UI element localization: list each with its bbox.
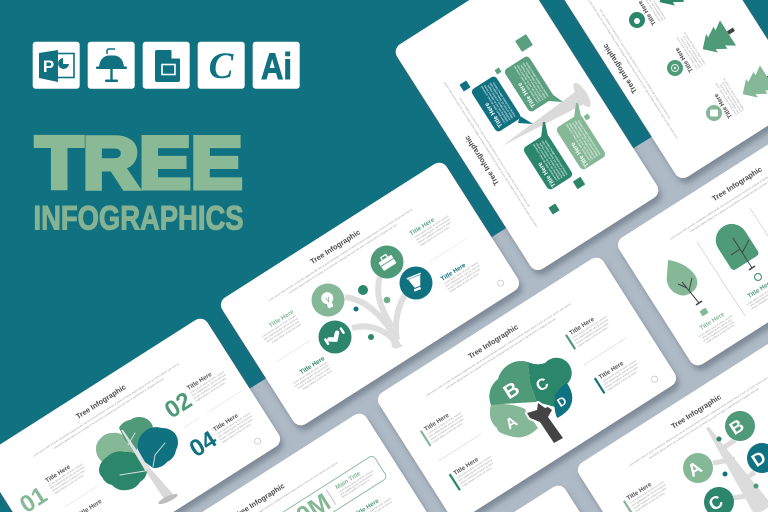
callout: dark green: adipiscing elit, sed do eiusmod tempo — [534, 142, 561, 181]
panel: top callout slide — [392, 0, 662, 273]
callout: dark green: Title Here — [536, 160, 558, 188]
tree trunk — [502, 81, 594, 146]
slide texts: tetur adipiscing elit, sed do eiusmod — [191, 373, 227, 397]
slide texts: tetur adipiscing elit, sed do eiusmod — [263, 317, 299, 341]
callout: teal: adipiscing elit, sed do eiusmod tempo — [482, 84, 509, 123]
slide texts: 02 — [160, 387, 197, 424]
item: left column: magna aliqua ut enim ad mini — [706, 324, 735, 344]
slide texts: Title Here — [440, 261, 468, 283]
slide texts: tempor incididunt ut labore et dolor — [460, 462, 494, 485]
slide texts: tempor incididunt ut labore et dolor — [193, 377, 227, 400]
slide texts: Title Here — [186, 371, 214, 392]
slide texts: magna aliqua ut enim ad minim — [271, 323, 302, 344]
callout: teal: Lorem ipsum dolor sit amet, consectet — [479, 85, 506, 124]
slide texts: tetur adipiscing elit, sed do eiusmo — [340, 473, 374, 496]
icon: top pine tree — [652, 0, 693, 15]
callout: dark green: Lorem ipsum dolor sit amet, consectet — [531, 143, 558, 182]
slide card — [615, 99, 768, 369]
panel: bottom right circle tree slide — [575, 324, 768, 512]
slide texts: Lorem ipsum dolor sit amet, consectetur adipiscing elit, sed do eiusmod tempor incididunt ut labore et dolore magna aliqua ut enim ad minim veniam quis nostrud — [425, 302, 572, 397]
slide texts: magna aliqua ut enim ad minim — [461, 467, 492, 488]
slide texts: Lorem ipsum dolor sit amet, consect — [48, 463, 84, 487]
icon: Illustrator — [253, 42, 300, 89]
slide texts: Title Here — [452, 456, 480, 477]
icon: PowerPoint: P — [43, 57, 54, 76]
slide texts: Title Here — [212, 412, 240, 433]
panel: bottom left numbered slide — [0, 315, 283, 512]
item: second: tetur adipiscing elit, sed do eius — [680, 37, 701, 68]
slide texts — [0, 331, 271, 512]
callout: teal: incididunt ut labore et dolore magna — [486, 84, 512, 121]
dividers — [697, 208, 768, 316]
slide texts: tetur adipiscing elit, sed do eiusmod — [416, 217, 451, 242]
slide texts: Lorem ipsum dolor sit amet, consect — [601, 359, 637, 384]
slide texts: tetur adipiscing elit, sed do eiusmod — [445, 264, 481, 288]
item: third: tempor incididunt ut labore et do — [721, 80, 743, 113]
slide texts: tempor incididunt ut labore et dolor — [266, 320, 301, 343]
canopy: segment B — [489, 361, 537, 405]
slide card — [392, 0, 662, 273]
callout: teal: nostrud exercitation ullamco laboris — [491, 81, 517, 118]
callout: light green: Title Here — [569, 140, 591, 168]
slide texts: tempor incididunt ut labore et — [341, 479, 370, 499]
callout: light green — [555, 103, 607, 171]
slide texts: exercitation ullamco laboris nisi ut aliquip ex ea commodo consequat duis aute irure dolor in reprehenderit in voluptate velit esse — [53, 377, 165, 450]
canopy: teal leaf — [138, 427, 178, 468]
slide texts: tempor incididunt ut labore et dolor — [447, 268, 481, 291]
slide texts — [398, 274, 659, 503]
slide texts: Lorem ipsum dolor sit amet, consect — [190, 370, 225, 395]
item: right column — [741, 274, 768, 312]
callout: teal — [470, 75, 533, 133]
slide texts: Lorem ipsum dolor sit amet, consect — [338, 470, 374, 494]
slide texts: magna aliqua ut enim ad minim — [449, 272, 480, 294]
panel: software icons — [33, 42, 300, 89]
slide texts: tetur adipiscing elit, sed do eiusmod — [458, 458, 494, 482]
slide card — [0, 315, 283, 512]
item: second: magna aliqua ut enim ad minim ve — [683, 31, 706, 65]
icon: handshake circle — [318, 320, 352, 354]
slide card — [375, 254, 679, 512]
icon: light bulb circle — [312, 284, 344, 316]
slide texts: Main Title — [334, 470, 363, 491]
slide texts: Title Here — [299, 355, 327, 376]
icon: leaf tree — [667, 260, 702, 305]
icon: round badges — [629, 12, 722, 121]
slide texts: Lorem ipsum dolor sit amet, consectetur adipiscing elit, sed do eiusmod tempor incididunt ut labore et dolore magna aliqua ut enim ad minim veniam quis nostrud — [33, 362, 180, 458]
item: left column: tempor incididunt ut labore et do — [703, 320, 735, 342]
item: second: tempor incididunt ut labore et do — [682, 34, 704, 67]
circle B: B — [726, 415, 748, 439]
canopy: dark leaf — [99, 451, 147, 490]
tree trunk — [121, 430, 179, 506]
canopy: segment D — [554, 383, 572, 418]
icon: Google Slides — [143, 42, 190, 89]
icon: round tree — [710, 218, 760, 271]
callout: dark green: aliqua ut enim ad minim veniam quis — [540, 139, 566, 178]
slide texts: Tree Infographic — [466, 322, 520, 361]
slide texts: tetur adipiscing elit, sed do eiusmod — [50, 466, 86, 490]
slide heading and intro: exercitation ullamco laboris nisi ut aliquip ex ea commodo consequat duis aute irure dolor in reprehenderit in voluptate velit esse — [599, 8, 671, 119]
item: third — [708, 77, 745, 120]
icon: briefcase circle — [370, 246, 404, 278]
slide texts: Lorem ipsum dolor sit amet, consect — [427, 411, 463, 435]
slide card — [537, 0, 768, 181]
slide texts — [185, 432, 401, 512]
slide texts: exercitation ullamco laboris nisi ut aliquip ex ea commodo consequat duis aute irure dolor in reprehenderit in voluptate velit esse — [288, 223, 398, 295]
slide texts: Lorem ipsum dolor sit amet, consect — [629, 480, 665, 505]
tree trunk and branches — [706, 427, 768, 512]
slide texts: Tree Infographic — [74, 382, 128, 421]
slide texts: Title Here — [268, 308, 296, 329]
letters: A — [502, 413, 521, 433]
callout: light green: aliqua ut enim ad minim veniam quis — [573, 119, 599, 158]
slide texts: magna aliqua ut enim ad minim — [577, 327, 608, 348]
callout: light green: incididunt ut labore et dolore magna — [571, 122, 597, 159]
trunk over canopy — [120, 430, 165, 475]
slide texts: tempor incididunt ut labore et dolor — [605, 366, 639, 389]
slide texts: magna aliqua ut enim ad minim — [221, 423, 252, 444]
decorative squares — [459, 34, 590, 215]
slide texts: exercitation ullamco laboris nisi ut aliquip ex ea commodo consequat duis aute irure dolor in reprehenderit in voluptate velit esse — [648, 387, 760, 460]
slide texts: Title Here — [626, 481, 653, 502]
slide texts: magna aliqua ut enim ad minim — [195, 382, 226, 403]
slide texts: magna aliqua ut enim ad minim — [419, 226, 450, 247]
icon: middle pine tree — [695, 17, 742, 62]
item: second: Title Here — [674, 46, 695, 73]
slide texts: magna aliqua ut enim ad minim — [432, 423, 463, 444]
slide texts: Lorem ipsum dolor sit amet, consect — [572, 315, 608, 339]
callout: medium green: aliqua ut enim ad minim veniam quis — [521, 61, 547, 100]
callout: medium green: adipiscing elit, sed do eiusmod tempo — [515, 64, 542, 103]
slide texts: Lorem ipsum dolor sit amet, consect — [261, 314, 297, 338]
item: left column: tetur adipiscing elit, sed do eius — [702, 318, 733, 340]
item: third: Title Here — [713, 92, 734, 119]
slide texts: tetur adipiscing elit, sed do eiusmod — [294, 364, 330, 388]
decorative dots — [354, 285, 390, 340]
callout: medium green: Title Here — [516, 81, 537, 109]
heading: INFOGRAPHICS: INFOGRAPHICS — [34, 200, 244, 238]
tree trunk — [527, 403, 563, 443]
slide texts: tempor incididunt ut labore et dolor — [430, 418, 465, 441]
letters: B — [500, 378, 524, 404]
slide texts: tempor incididunt ut labore et dolor — [297, 367, 331, 390]
slide texts: exercitation ullamco laboris nisi ut aliquip ex ea commodo consequat duis aute irure dolor in reprehenderit in voluptate velit esse — [445, 317, 557, 390]
slide texts: tempor incididunt ut labore et dolor — [633, 487, 667, 510]
icon: Illustrator: Ai — [261, 46, 292, 87]
item: third: Lorem ipsum dolor sit amet, conse — [714, 82, 738, 116]
callout: teal: Title Here — [483, 101, 504, 129]
canopy: segment C — [528, 358, 572, 407]
decorative dots — [716, 436, 758, 488]
canopy: medium leaf — [119, 417, 153, 450]
slide texts: Lorem ipsum dolor sit amet, consect — [216, 412, 252, 436]
callout: light green: Lorem ipsum dolor sit amet, consectet — [564, 123, 591, 162]
slide heading and intro: Tree Infographic — [601, 42, 639, 95]
slide texts — [238, 177, 505, 410]
icon: Canva: C — [209, 46, 235, 87]
letters — [500, 375, 570, 433]
panel: centre lettered tree slide — [375, 254, 679, 512]
letters: D — [554, 393, 570, 410]
canopy: segment A — [490, 404, 538, 437]
slide texts: Title Here — [408, 216, 436, 237]
slide texts: Tree Infographic — [309, 228, 362, 266]
callout: medium green: Lorem ipsum dolor sit amet, consectet — [512, 65, 539, 104]
icon: megaphone circle — [400, 266, 432, 300]
slide heading and intro: Lorem ipsum dolor sit amet, consectetur adipiscing elit, sed do eiusmod tempor incididunt ut labore et dolore magna aliqua ut enim ad minim veniam quis nostrud — [443, 81, 538, 228]
callout: light green: adipiscing elit, sed do eiusmod tempo — [567, 122, 594, 161]
slide card — [218, 159, 522, 429]
icon: lower pine tree — [735, 62, 768, 107]
slide texts: Title Here — [44, 463, 72, 484]
slide texts: tetur adipiscing elit, sed do eiusmod — [574, 318, 609, 342]
slide texts: Title Here — [423, 412, 451, 433]
circle C — [704, 487, 734, 512]
callout: dark green: nostrud exercitation ullamco laboris — [543, 139, 569, 176]
slide texts: Lorem ipsum dolor sit amet, consect — [443, 261, 479, 285]
slide texts: magna aliqua ut enim ad minim — [53, 474, 84, 495]
panel: bottom centre metric slide — [138, 410, 442, 512]
slide texts — [601, 361, 768, 512]
slide texts: magna aliqua ut enim ad minim — [302, 369, 333, 391]
slide heading and intro: Tree Infographic — [462, 134, 501, 187]
slide texts: tempor incididunt ut labore et dolor — [52, 469, 86, 493]
item: left column — [693, 308, 738, 346]
slide texts: 04 — [185, 425, 222, 463]
canopy: light leaf — [96, 433, 140, 465]
slide card — [575, 324, 768, 512]
callout: light green: nostrud exercitation ullamco laboris — [576, 119, 602, 156]
callout: medium green: incididunt ut labore et dolore magna — [519, 64, 545, 101]
circle B — [725, 411, 755, 441]
tree branches — [345, 277, 405, 349]
slide texts: tetur adipiscing elit, sed do eiusmod — [429, 414, 464, 438]
item: left column: Title Here — [699, 311, 726, 332]
letters: C — [533, 375, 552, 395]
panel: centre branching tree slide — [218, 159, 522, 429]
slide texts: Lorem ipsum dolor sit amet, consect — [456, 455, 492, 480]
icon: PowerPoint — [33, 42, 80, 89]
slide heading and intro: Tree Infographic — [710, 165, 764, 203]
slide texts: tempor incididunt ut labore et dolor — [417, 221, 452, 244]
item: third: tetur adipiscing elit, sed do eius — [719, 83, 740, 114]
slide texts: tempor incididunt ut labore et dolor — [219, 418, 254, 441]
circle A — [683, 453, 713, 483]
slide texts: Lorem ipsum dolor sit amet, consect — [414, 215, 450, 239]
item: third: magna aliqua ut enim ad minim ve — [722, 77, 745, 111]
slide card — [138, 410, 442, 512]
item: first — [632, 0, 667, 27]
slide texts: Lorem ipsum dolor sit amet, consect — [292, 361, 328, 385]
slide texts: magna aliqua ut enim ad minim — [607, 371, 638, 392]
slide texts: Title Here — [568, 316, 596, 337]
circle A: A — [684, 457, 706, 481]
slide texts: tempor incididunt ut labore et dolor — [576, 322, 610, 345]
slide heading and intro: exercitation ullamco laboris nisi ut aliquip ex ea commodo consequat duis aute irure dolor in reprehenderit in voluptate velit esse — [458, 96, 531, 208]
slide texts: tetur adipiscing elit, sed do eiusmod — [631, 483, 667, 507]
icon: Keynote — [88, 42, 135, 89]
item: left column: Lorem ipsum dolor sit amet, consect — [698, 314, 733, 339]
item: second — [669, 31, 706, 74]
slide texts: tetur adipiscing elit, sed do eiusmod — [218, 414, 253, 439]
slide texts: Title Here — [598, 360, 625, 381]
heading: TREE: TREE — [36, 123, 242, 204]
panel: top right pine tree slide — [537, 0, 768, 181]
icon: Canva — [198, 42, 245, 89]
slide texts: Lorem ipsum dolor sit amet, consectetur adipiscing elit, sed do eiusmod tempor incididunt ut labore et dolore magna aliqua ut enim ad minim veniam quis nostrud — [268, 208, 414, 302]
callout: medium green: nostrud exercitation ullamco laboris — [524, 61, 550, 98]
item: second: Lorem ipsum dolor sit amet, conse — [675, 36, 699, 70]
callout: dark green: incididunt ut labore et dolore magna — [538, 142, 564, 179]
callout: teal: aliqua ut enim ad minim veniam quis — [488, 81, 514, 120]
slide texts: Tree Infographic — [669, 392, 723, 431]
callout: dark green — [522, 122, 574, 191]
callout: medium green — [503, 55, 563, 113]
panel: right leaf tree slide — [615, 99, 768, 369]
slide texts: tetur adipiscing elit, sed do eiusmod — [603, 362, 639, 386]
panel: bottom slide peek — [337, 482, 641, 512]
